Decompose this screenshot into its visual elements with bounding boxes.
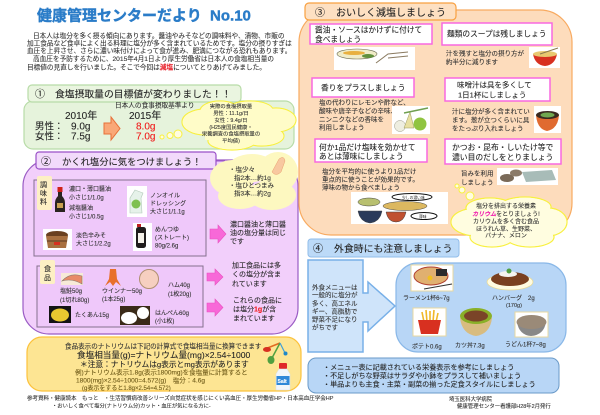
panel: sodium conversion: 食塩相当量(g)=ナトリウム量(mg)×2.54÷1000 <box>77 349 251 360</box>
credit <box>449 395 551 410</box>
callout: actual intake: 平均値) <box>222 136 240 144</box>
icon: noodle bowl <box>529 47 560 68</box>
tip: one strong dish: 重点的に使うことが効果的です。 <box>322 174 419 184</box>
panel: eating out tips: ・メニュー表に記載されている栄養表示を参考にしましょう <box>323 362 514 372</box>
note: processed food <box>232 260 281 288</box>
tip: one strong dish: 何か1品だけ塩味を効かせて <box>319 142 416 152</box>
arrow: seasonings note <box>210 225 226 243</box>
panel: sodium conversion: 例)ナトリウム表示1.8g(表示1800mg)を食塩量に計算すると <box>75 368 248 376</box>
note: 1g of salt: は塩分1gが含 <box>233 304 276 314</box>
comparison table: 男性： <box>35 120 64 132</box>
tip: dashi: 旨みを利用 <box>461 168 494 178</box>
item: hamburg <box>487 268 535 309</box>
note: soy sauce: 濃口醤油と薄口醤 <box>230 220 286 228</box>
intro text: 日本人は塩分を多く摂る傾向にあります。醤油やみそなどの調味料や、漬物、市販の <box>33 31 285 40</box>
tip: dashi: かつお・昆布・しいたけ等で <box>452 142 554 152</box>
heading: section 3: おいしく減塩しましょう <box>336 6 446 19</box>
callout: pinch of salt: ・塩少々 <box>229 164 255 174</box>
text: ham: (1枚20g) <box>168 290 191 298</box>
arrow: 1g note <box>207 299 223 316</box>
callout: potassium: カリウムを多く含む食品 <box>473 218 539 226</box>
icon: meal set <box>351 192 448 224</box>
tip: one strong dish: 薄味の物から食べましょう <box>322 182 400 192</box>
callout: actual intake: 栄養調査の食塩摂取量の <box>202 130 260 138</box>
panel: sodium conversion: (g表示をすると1.8g×2.54=4.572) <box>82 384 171 392</box>
references: ・おいしく食べて塩分(ナトリウム分)カット・血圧が気になる方に- <box>52 402 211 410</box>
panel: section 1 salt targets <box>24 85 296 150</box>
item: fries <box>412 308 446 350</box>
text: hanpen: はんぺん60g <box>155 310 189 317</box>
tag: foods: 品 <box>44 274 51 282</box>
panel: sodium conversion: 1800(mg)×2.54÷1000=4.572(g) 塩分：4.6g <box>76 376 205 384</box>
tip: leave soup: 麺類のスープは残しましょう <box>447 28 546 38</box>
text: mentsuyu <box>155 226 189 250</box>
note: soy sauce: です <box>230 238 244 246</box>
text: dressing: ノンオイル <box>150 192 180 200</box>
icon: meal set: 薄味 <box>419 214 427 219</box>
arrow panel: eating out warning: ギー、高脂肪で <box>312 306 358 316</box>
callout: actual intake <box>160 101 296 150</box>
tip: dashi: 濃い目のだしをとりましょう <box>452 152 553 162</box>
callout: pinch of salt: 指2本…約1g <box>234 173 271 182</box>
text: takuan: たくあん15g <box>75 312 109 319</box>
note: 1g of salt: まれています <box>233 314 275 322</box>
text: soy sauce: 減塩醤油 <box>69 204 93 212</box>
icon: shiitake and kombu <box>497 168 558 185</box>
tip: dashi: しましょう <box>461 178 494 186</box>
panel: seasonings <box>34 176 206 256</box>
icon: soy sauce bottle <box>55 187 65 212</box>
item: hamburg: (170g) <box>506 303 522 309</box>
comparison table: 9.0g <box>71 122 90 132</box>
text: mentsuyu: (ストレート) <box>155 234 189 242</box>
tip: miso soup: 味噌汁は具を多くして <box>457 80 532 90</box>
panel: eating out tips <box>308 358 559 393</box>
text: ham <box>168 282 191 298</box>
icon: octopus wiener <box>105 269 121 286</box>
callout: potassium: 塩分を排出する栄養素 <box>476 202 536 210</box>
note: soy sauce: 油の塩分量は同じ <box>230 228 286 237</box>
arrow panel: eating out warning: 外食メニューは <box>312 282 358 292</box>
tip: add aroma <box>312 78 430 134</box>
item: ramen: ラーメン1杯6~7g <box>403 294 450 302</box>
text: soy sauce: 濃口・薄口醤油 <box>69 185 111 193</box>
heading: section 3 <box>305 3 456 20</box>
heading: section 1: ① <box>35 88 45 100</box>
item: katsudon: カツ丼7.3g <box>455 342 485 350</box>
callout: actual intake: 男性：11.1g/日 <box>213 109 249 117</box>
text: wiener: (1本25g) <box>102 295 125 303</box>
icon: salted salmon <box>61 273 83 285</box>
note: soy sauce <box>230 220 286 246</box>
callout: pinch of salt: ・塩ひとつまみ <box>229 180 275 190</box>
heading: section 1 <box>28 85 241 102</box>
text: soy sauce: 小さじ1/1.0g <box>69 194 104 202</box>
tip: one strong dish: あとは薄味にしましょう <box>319 151 404 161</box>
tip: miso soup: 1日1杯にしましょう <box>458 90 526 100</box>
panel: section 2 hidden salt <box>23 152 298 334</box>
text: salmon <box>60 287 89 304</box>
text: dressing <box>150 192 186 216</box>
text: dressing: ドレッシング <box>150 200 186 208</box>
panel: restaurant food salt <box>396 263 566 352</box>
tip: miso soup: ます。葱が立つくらいに具 <box>452 115 530 124</box>
panel: eating out tips: ・不足しがちな野菜はサラダや小鉢をプラスして補いましょう <box>323 371 521 380</box>
source caption: 日本人の食事摂取基準より <box>115 100 195 110</box>
item: fries: ポテト0.6g <box>412 342 442 350</box>
text: hanpen <box>155 310 189 325</box>
heading: section 3: ③ <box>315 7 325 19</box>
intro text: 目標値の見直しを行いました。そこで今回は減塩についてとりあげてみました。 <box>27 62 266 72</box>
intro text: 加工食品など食卓によく出る料理に塩分が多く含まれているためです。塩分の摂りすぎは <box>27 38 292 48</box>
tip: add aroma: 酸味や唐辛子などの辛味、 <box>319 106 397 115</box>
tip: dashi <box>445 139 561 186</box>
tip: miso soup: 汁に塩分が多く含まれてい <box>452 106 530 116</box>
tip: dip sauce: 食べましょう <box>315 35 361 44</box>
icon: ham <box>140 270 158 288</box>
callout: actual intake: (H25度国民健康・ <box>209 123 253 131</box>
heading: section 2 <box>36 152 225 169</box>
item: udon: うどん1杯7~8g <box>505 340 546 348</box>
comparison table: 2010年 <box>65 109 97 122</box>
note: 1g of salt <box>233 296 282 322</box>
tip: leave soup <box>442 23 560 68</box>
item: udon <box>505 312 548 348</box>
panel: eating out tips: ・単品よりも主食・主菜・副菜の揃った定食スタイルにしましょう <box>323 380 536 388</box>
text: ham: ハム40g <box>168 282 190 289</box>
tip: one strong dish: 塩分を平均的に使うより1品だけ <box>322 166 416 176</box>
intro text: 血圧を上昇させ、さらに濃い味付けによって食が進み、肥満につながる恐れもあります。 <box>27 46 291 55</box>
comparison table: 2015年 <box>129 109 161 122</box>
arrow panel: eating out warning: 一般的に塩分が <box>312 290 358 299</box>
tip: miso soup: をたっぷり入れましょう <box>452 124 524 132</box>
arrow panel: eating out warning: 多く、高エネル <box>312 298 358 308</box>
text: miso: 淡色辛みそ <box>76 232 106 240</box>
callout: actual intake: 女性：9.4g/日 <box>215 116 247 124</box>
text: wiener: ウインナー50g <box>102 287 142 295</box>
panel: sodium conversion <box>27 337 301 392</box>
tip: add aroma: 香りをプラスしましょう <box>321 82 405 92</box>
tag: seasonings: 調 <box>40 181 47 189</box>
heading: section 4: ④ <box>313 243 323 255</box>
icon: hanpen <box>120 306 150 325</box>
text: soy sauce: 小さじ1/0.5g <box>69 212 104 220</box>
text: miso: 大さじ1/2.2g <box>76 240 111 248</box>
references <box>27 394 334 410</box>
heading: section 4: 外食時にも注意しましょう <box>334 242 453 255</box>
tip: dip sauce: 醤油・ソースはかけずに付けて <box>315 24 422 34</box>
text: hanpen: (小1枚) <box>155 317 174 325</box>
comparison table: 8.0g <box>136 122 155 132</box>
tip: dip sauce <box>310 24 432 70</box>
panel: sodium conversion: 食品表示のナトリウムは下記の計算式で食塩相当量に換算できます <box>65 342 262 350</box>
icon: salt shaker <box>276 363 290 390</box>
icon: pickled radish <box>49 306 71 323</box>
tip: add aroma: ニンニクなどの香味を <box>319 114 384 124</box>
icon: miso tub <box>43 229 72 250</box>
references: 参考資料・健康読本 もっと ・生活習慣病改善シリーズ自覚症状を感じにくい高血圧・厚生労働省HP・日本高血圧学会HP <box>27 394 334 402</box>
title: 健康管理センターだより No.10 <box>37 6 251 24</box>
tag: seasonings: 料 <box>40 197 47 206</box>
heading: section 2: かくれ塩分に気をつけましょう！ <box>62 156 201 167</box>
text: salmon: (1切れ80g) <box>60 297 89 304</box>
comparison table: 女性： <box>35 130 64 142</box>
tag: foods <box>40 260 55 284</box>
text: salmon: 塩鮭50g <box>60 287 82 295</box>
text: mentsuyu: めんつゆ <box>155 226 179 234</box>
arrow panel: eating out warning <box>308 260 395 352</box>
icon: miso soup bowl <box>534 106 561 133</box>
callout: pinch of salt: 指3本…約2g <box>234 188 271 198</box>
tip: add aroma: 塩の代わりにレモンや酢など、 <box>319 98 410 106</box>
icon: dipping food <box>334 47 415 70</box>
note: processed food: 加工食品には多 <box>232 260 281 270</box>
tag: seasonings: 味 <box>40 188 47 198</box>
text: miso <box>76 232 111 248</box>
arrow panel: eating out warning: 野菜不足になり <box>312 314 358 324</box>
comparison table: 7.0g <box>136 132 155 142</box>
panel: sodium conversion: ＊注意：ナトリウムはg表示とmg表示があります <box>80 359 249 369</box>
item: katsudon <box>455 308 492 350</box>
note: 1g of salt: これらの食品に <box>233 296 282 304</box>
icon: dressing bottle <box>127 186 147 217</box>
arrow: processed food note <box>207 269 223 285</box>
credit: 埼玉医科大学病院 <box>449 395 493 403</box>
item: ramen <box>403 265 453 302</box>
intro text: 高血圧を予防するために、2015年4月1日より厚生労働省は日本人の食塩相当量の <box>33 54 274 63</box>
note: processed food: れています <box>232 280 267 288</box>
comparison table <box>35 109 161 142</box>
tag: seasonings <box>37 176 52 210</box>
credit: 健康管理センター看護部H28年2月発行 <box>457 402 551 410</box>
callout: pinch of salt <box>210 152 298 210</box>
icon: salt shaker: Salt <box>278 379 287 385</box>
icon: pinching fingers <box>272 157 285 174</box>
icon: herbs and lemon <box>392 106 430 134</box>
text: wiener <box>102 287 142 303</box>
heading: section 4 <box>308 239 459 257</box>
icon: mentsuyu bottle <box>133 223 152 251</box>
item: hamburg: ハンバーグ 2g <box>492 294 535 302</box>
callout: actual intake: 実際の食塩摂取量 <box>210 102 253 110</box>
panel: section 3 reduce salt tastily <box>299 3 572 235</box>
arrow: 2010 to 2015 <box>104 117 120 140</box>
heading: section 1: 食塩摂取量の目標値が変わりました！！ <box>55 88 231 100</box>
tip: add aroma: 利用しましょう <box>319 122 364 132</box>
tip: miso soup <box>445 78 561 133</box>
callout: potassium: バナナ、メロン <box>485 232 527 240</box>
comparison table: 7.5g <box>71 132 90 142</box>
icon: meal set: 少しの濃い味 <box>402 195 425 200</box>
text: dressing: 大さじ1/1.1g <box>150 208 185 216</box>
callout: potassium <box>451 184 567 247</box>
intro text <box>27 31 292 72</box>
icon: measuring spoons <box>263 343 288 364</box>
heading: section 2: ② <box>41 156 51 168</box>
tip: one strong dish <box>315 139 448 224</box>
arrow panel: eating out warning: がちです <box>312 322 338 332</box>
note: processed food: くの塩分が含ま <box>232 270 281 278</box>
panel: foods <box>37 260 203 327</box>
callout: potassium: カリウムをとりましょう! <box>472 211 540 218</box>
tip: leave soup: 汁を残すと塩分の摂り方が <box>446 48 524 58</box>
tip: leave soup: 約半分に減ります <box>446 57 498 66</box>
text: soy sauce <box>69 185 111 220</box>
tag: foods: 食 <box>44 265 51 273</box>
text: mentsuyu: 80g/2.6g <box>155 244 178 250</box>
callout: potassium: ほうれん草、生野菜、 <box>476 225 536 233</box>
